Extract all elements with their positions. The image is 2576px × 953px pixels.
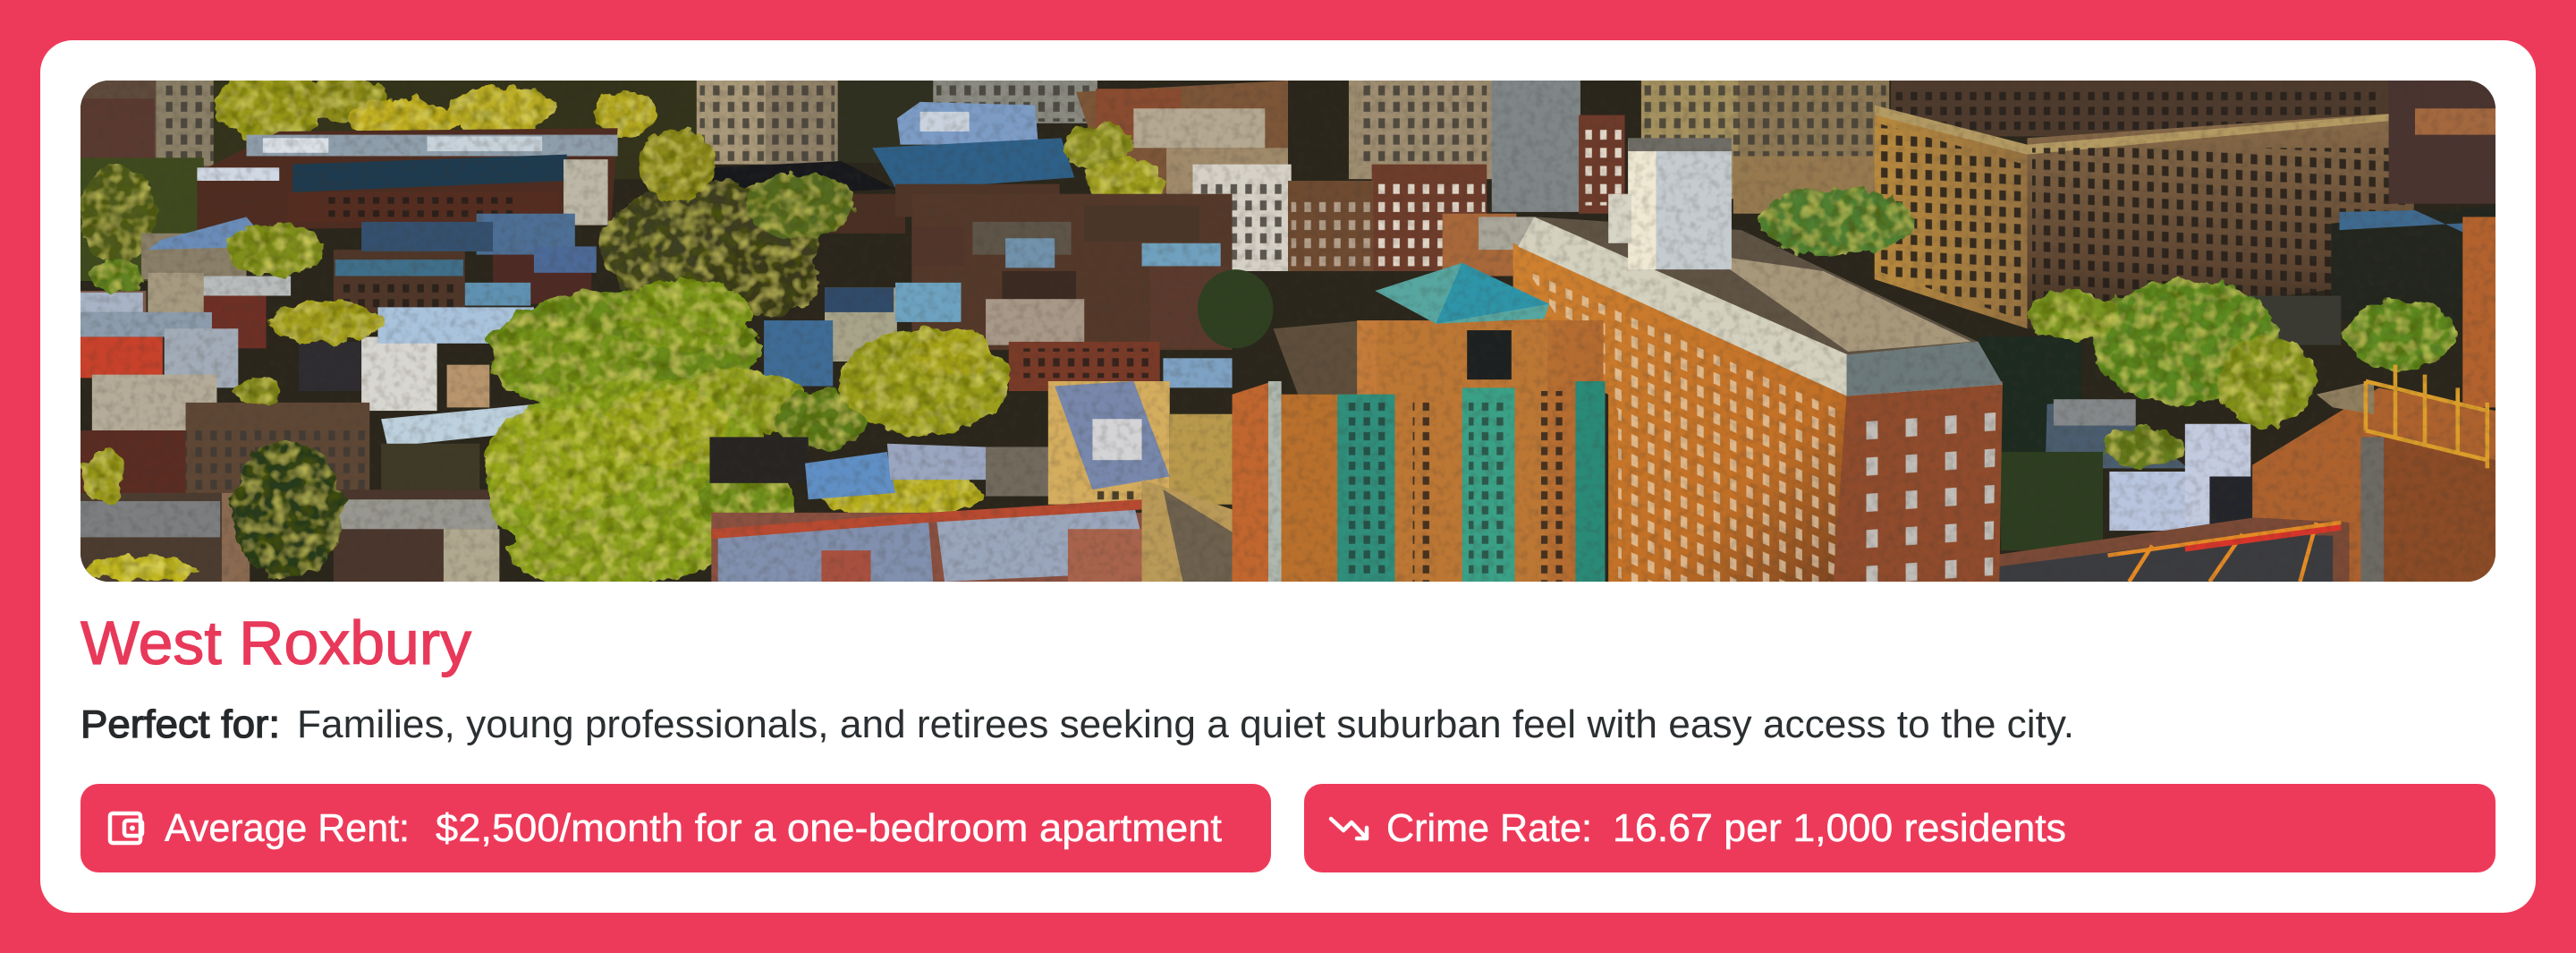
mid building group center <box>764 194 1273 391</box>
text: crime rate label: Crime Rate: <box>1386 806 1592 850</box>
stat pill: average rent <box>80 784 1271 872</box>
left top buildings and dark trees <box>80 81 707 281</box>
icon: trending down arrow <box>1331 819 1367 838</box>
text: average rent label: Average Rent: <box>165 806 410 850</box>
text: crime rate value: 16.67 per 1,000 residents <box>1613 806 2066 850</box>
teal roof tower <box>1337 263 1605 582</box>
mid rowhouses left <box>80 214 597 582</box>
text: perfect for label: Perfect for: <box>80 702 280 746</box>
rooftop garden tree <box>1758 189 1916 255</box>
building behind teal tower <box>1233 320 1358 582</box>
text: perfect for description: Families, young professionals, and retirees seeking a quiet suburban feel with easy access to the city. <box>297 702 2074 746</box>
photo: aerial view of neighborhood at golden hour <box>79 69 2496 587</box>
main orange slab building <box>1513 138 2003 582</box>
top center grey block and roofs <box>838 81 1097 163</box>
big green trees center <box>483 279 1011 587</box>
far right buildings <box>2331 81 2496 407</box>
yellow tree canopy top left <box>79 69 657 263</box>
back center tall buildings <box>1288 81 1889 276</box>
green trees right <box>2028 279 2454 466</box>
purple blue roofs bottom center <box>711 499 1155 582</box>
beige apartment top center <box>697 81 838 165</box>
right side trees <box>1979 296 2341 550</box>
right top rowhouses <box>1076 81 1292 271</box>
lower center rowhouses <box>709 381 1233 506</box>
orange right building with yellow scaffold <box>2252 365 2496 582</box>
large background tower <box>1875 81 2417 328</box>
title: West Roxbury <box>80 608 471 677</box>
text: average rent value: $2,500/month for a one-bedroom apartment <box>436 806 1222 850</box>
bottom tan terrace building <box>1141 480 1233 582</box>
icon: wallet <box>110 813 142 843</box>
stat pill: crime rate <box>1304 784 2496 872</box>
church building with slate roof <box>197 128 618 230</box>
dark roof and blue roof church <box>711 138 1074 234</box>
center dark trees <box>599 125 1165 316</box>
lower right roof with red scaffold <box>1970 517 2350 582</box>
mid trees left <box>82 224 381 582</box>
